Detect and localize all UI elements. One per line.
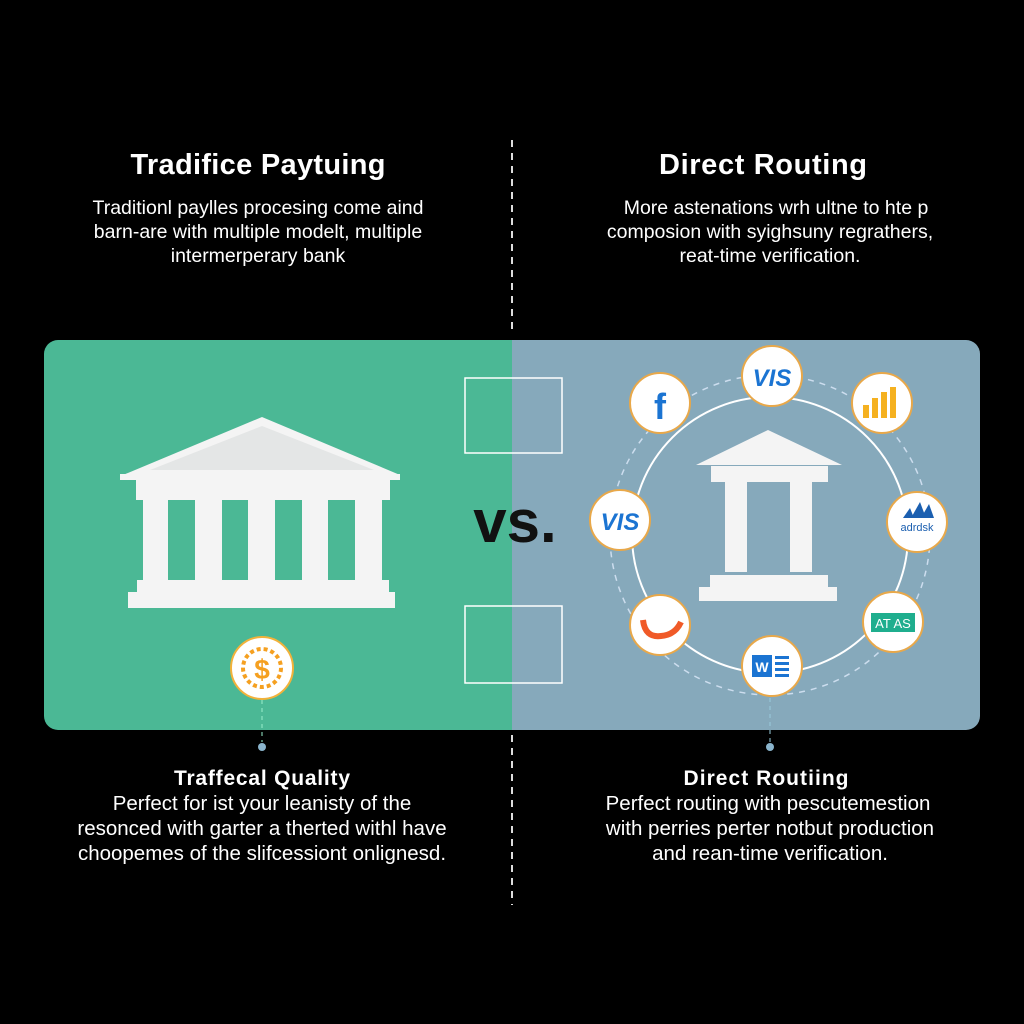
- heading: traffecal quality: Traffecal Quality: [174, 767, 350, 790]
- text block: direct description: reat-time verification.: [680, 245, 860, 267]
- icon: bank right: [696, 430, 842, 601]
- text block: direct description: composion with syighsuny regrathers,: [607, 221, 933, 243]
- icon: facebook: f: [654, 386, 667, 427]
- icon: bars: [863, 387, 896, 418]
- network: direct routing: [590, 346, 947, 696]
- heading: traditional: Tradifice Paytuing: [130, 149, 386, 181]
- icon: atas: AT AS: [875, 616, 911, 631]
- text block: traditional description: intermerperary bank: [171, 245, 345, 267]
- text block: right bottom: and rean-time verification.: [652, 842, 888, 865]
- text block: traditional description: Traditionl paylles procesing come aind: [93, 197, 423, 219]
- icon: dollar coin: $: [254, 654, 270, 685]
- icon: word: [752, 655, 789, 677]
- text block: right bottom: [605, 792, 934, 865]
- heading: direct routing bottom: Direct Routiing: [684, 767, 848, 790]
- text block: right bottom: with perries perter notbut production: [605, 817, 934, 840]
- text block: direct description: More astenations wrh ultne to hte p: [624, 197, 928, 219]
- icon: dollar coin: [231, 637, 293, 699]
- text block: traditional description: [93, 197, 423, 267]
- heading: direct routing: Direct Routing: [659, 149, 867, 181]
- panel: comparison: [44, 340, 980, 730]
- icon: adidas: adrdsk: [900, 522, 934, 534]
- icon: atas: [871, 613, 915, 632]
- icon: adidas: [900, 502, 934, 534]
- text block: left bottom: choopemes of the slifcessiont onlignesd.: [78, 842, 446, 865]
- text block: direct description: [607, 197, 933, 267]
- text block: left bottom: [77, 792, 447, 865]
- icon: word: W: [755, 659, 769, 675]
- text block: right bottom: Perfect routing with pescutemestion: [606, 792, 930, 815]
- label: vs: vs.: [473, 488, 557, 555]
- icon: visa top: VIS: [753, 365, 791, 392]
- text block: left bottom: resonced with garter a therted withl have: [77, 817, 447, 840]
- icon: bank left: [120, 417, 400, 608]
- text block: traditional description: barn-are with multiple modelt, multiple: [94, 221, 422, 243]
- icon: visa left: VIS: [601, 509, 639, 536]
- icon: hand: [643, 620, 681, 636]
- text block: left bottom: Perfect for ist your leanisty of the: [113, 792, 411, 815]
